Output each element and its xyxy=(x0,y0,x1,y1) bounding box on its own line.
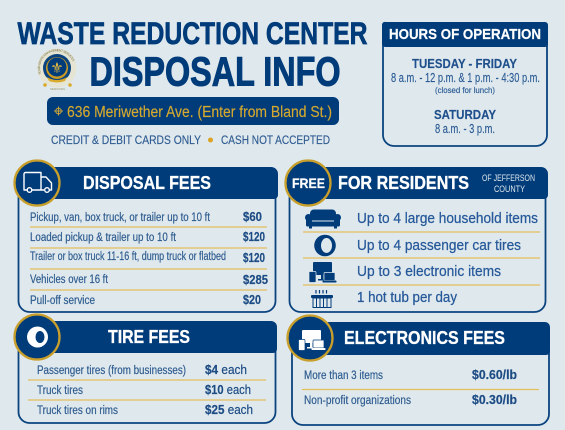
tire fee: truck tires xyxy=(37,383,251,397)
hours header xyxy=(382,22,548,47)
free for residents header xyxy=(300,167,548,199)
panel: electronics fees xyxy=(288,316,550,425)
title: waste reduction center: WASTE REDUCTION CENTER xyxy=(18,15,368,51)
county note xyxy=(482,173,535,194)
tuesday to friday hours: TUESDAY - FRIDAY xyxy=(412,56,517,71)
panel: tire fees xyxy=(14,314,277,423)
fee row: loaded pickup xyxy=(30,230,265,244)
panel: free for residents xyxy=(286,160,548,312)
free badge xyxy=(286,160,330,206)
free item: hot tub: 1 hot tub per day xyxy=(357,290,458,306)
payment note xyxy=(51,135,330,147)
icon: location marker xyxy=(54,106,63,116)
fee row: pickup: Pickup, van, box truck, or trailer up to 10 ft xyxy=(30,212,211,224)
panel: disposal fees xyxy=(14,160,278,312)
fee row: vehicles over 16 ft: $285 xyxy=(243,273,268,287)
fee row: pull-off service: Pull-off service xyxy=(30,295,95,307)
electronics fee: non-profit organizations xyxy=(304,393,517,407)
electronics fees header xyxy=(302,322,550,355)
disposal fees heading: DISPOSAL FEES xyxy=(83,173,211,193)
icon: electronics xyxy=(288,316,332,360)
free for residents heading: FOR RESIDENTS xyxy=(338,173,469,193)
hours heading: HOURS OF OPERATION xyxy=(389,26,541,43)
panel: hours of operation xyxy=(382,22,548,146)
fee row: pull-off service xyxy=(30,293,261,307)
saturday hours: SATURDAY xyxy=(434,107,496,122)
saturday hours xyxy=(434,107,496,136)
tuesday to friday hours: (closed for lunch) xyxy=(435,85,495,95)
icon: hot tub xyxy=(311,290,333,308)
payment note: CREDIT & DEBIT CARDS ONLY xyxy=(51,135,201,147)
tire fee: truck tires: Truck tires xyxy=(37,385,83,397)
tire fee: passenger tires: $4 each xyxy=(205,363,247,377)
logo seal xyxy=(38,48,76,91)
icon: sofa xyxy=(305,210,341,228)
fee row: trailer or box truck: Trailer or box truck 11-16 ft, dump truck or flatbed xyxy=(30,251,226,263)
free item: electronic items: Up to 3 electronic items xyxy=(357,264,501,280)
icon: delivery truck xyxy=(14,160,60,206)
electronics fee: non-profit organizations: $0.30/lb xyxy=(472,393,517,407)
icon: tire xyxy=(314,235,336,256)
payment note: CASH NOT ACCEPTED xyxy=(221,135,330,147)
title: disposal info: DISPOSAL INFO xyxy=(90,48,340,94)
tire fees header xyxy=(30,321,277,353)
logo seal: SERVICES xyxy=(50,87,65,91)
fee row: vehicles over 16 ft: Vehicles over 16 ft xyxy=(30,274,109,286)
tire fee: truck tires: $10 each xyxy=(205,383,251,397)
tire fees heading: TIRE FEES xyxy=(108,327,190,347)
logo seal: SOLID WASTE MANAGEMENT SERVICES xyxy=(38,49,74,74)
fee row: loaded pickup: Loaded pickup & trailer up to 10 ft xyxy=(30,232,177,244)
icon: electronics xyxy=(309,262,336,282)
free item: passenger car tires: Up to 4 passenger car tires xyxy=(357,238,521,254)
icon: tire xyxy=(14,314,60,360)
address pill xyxy=(47,97,339,125)
county note: COUNTY xyxy=(494,184,525,194)
address text: 636 Meriwether Ave. (Enter from Bland St.) xyxy=(67,104,332,121)
tuesday to friday hours xyxy=(391,56,540,95)
electronics fee: more than 3 items: More than 3 items xyxy=(304,370,383,382)
fee row: pull-off service: $20 xyxy=(243,293,261,307)
fee row: pickup: $60 xyxy=(243,210,262,224)
tire fee: truck tires on rims: $25 each xyxy=(205,403,253,417)
county note: OF JEFFERSON xyxy=(482,173,535,183)
free item: household items: Up to 4 large household items xyxy=(357,211,538,227)
electronics fee: more than 3 items: $0.60/lb xyxy=(472,368,517,382)
fee row: loaded pickup: $120 xyxy=(243,230,265,244)
electronics fee: non-profit organizations: Non-profit organizations xyxy=(304,395,411,407)
tire fee: truck tires on rims xyxy=(37,403,253,417)
fee row: vehicles over 16 ft xyxy=(30,273,268,287)
tire fee: passenger tires: Passenger tires (from businesses) xyxy=(37,365,186,377)
electronics fees heading: ELECTRONICS FEES xyxy=(344,328,505,348)
saturday hours: 8 a.m. - 3 p.m. xyxy=(435,121,495,136)
free badge: FREE xyxy=(292,176,325,191)
fee row: trailer or box truck: $120 xyxy=(243,251,265,265)
tire fee: truck tires on rims: Truck tires on rims xyxy=(37,405,118,417)
electronics fee: more than 3 items xyxy=(304,368,517,382)
disposal fees header xyxy=(30,167,278,199)
logo seal: ⚜ xyxy=(50,59,64,77)
